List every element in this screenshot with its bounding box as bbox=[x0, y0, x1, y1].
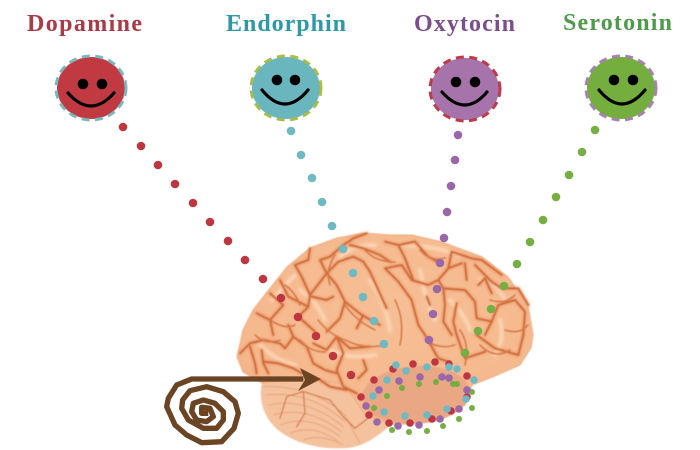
spiral arrow bbox=[167, 368, 321, 443]
gyri highlights bbox=[260, 245, 505, 365]
dots: serotonin path bbox=[371, 126, 599, 435]
face: Oxytocin bbox=[430, 57, 500, 121]
brain bbox=[237, 233, 533, 448]
title: Oxytocin: Oxytocin bbox=[414, 11, 515, 37]
Dopamine column bbox=[27, 11, 142, 120]
title: Serotonin: Serotonin bbox=[563, 10, 672, 36]
title: Endorphin: Endorphin bbox=[226, 11, 346, 37]
Endorphin column bbox=[226, 11, 346, 120]
Serotonin column bbox=[563, 10, 672, 120]
face: Serotonin bbox=[586, 56, 656, 120]
dots: oxytocin path bbox=[362, 131, 471, 430]
face: Endorphin bbox=[251, 56, 321, 120]
emotional centre patch bbox=[360, 362, 472, 428]
dots: endorphin path bbox=[287, 127, 478, 420]
cerebellum bbox=[261, 375, 395, 448]
title: Dopamine: Dopamine bbox=[27, 11, 142, 37]
dots: dopamine path bbox=[119, 123, 471, 427]
Oxytocin column bbox=[414, 11, 515, 121]
cerebrum folds bbox=[240, 233, 528, 393]
face: Dopamine bbox=[56, 56, 126, 120]
cerebrum bbox=[237, 233, 533, 425]
